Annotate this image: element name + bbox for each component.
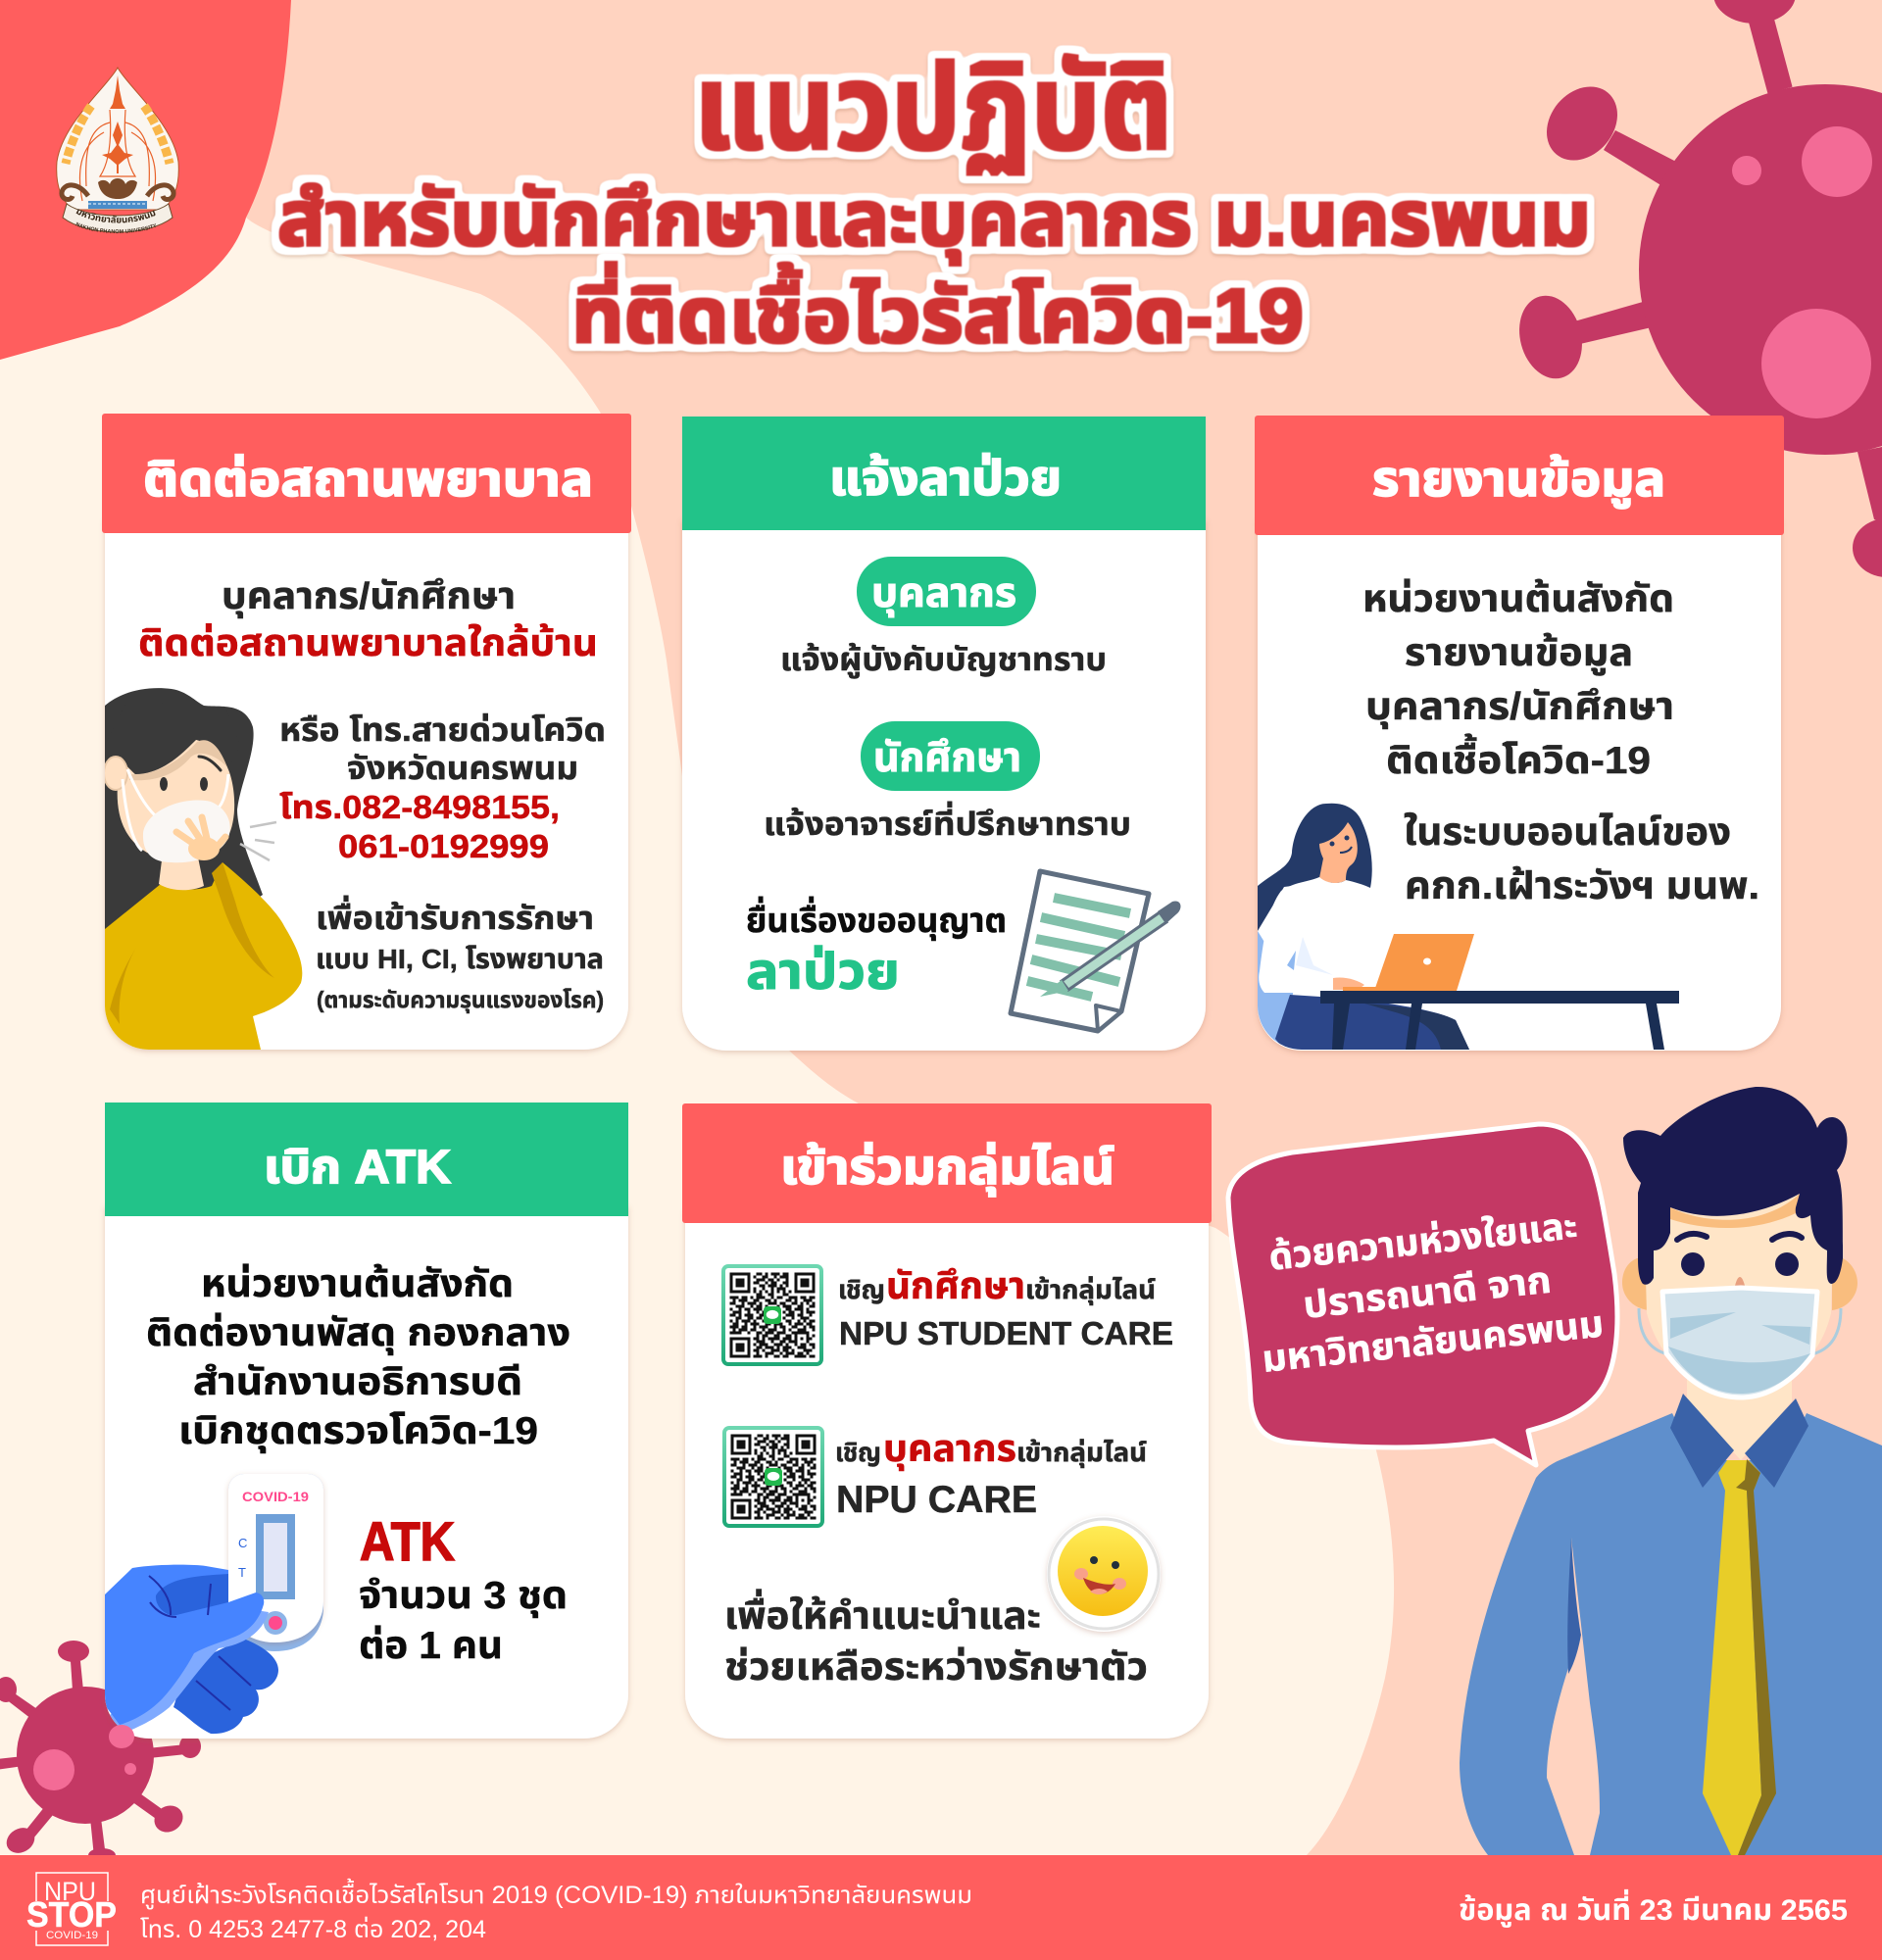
callout line 3: มหาวิทยาลัยนครพนม <box>1261 1304 1606 1381</box>
panel: notify sick leave <box>682 416 1206 1051</box>
illustration: masked man <box>1460 1087 1882 1855</box>
hair shadow <box>1670 1194 1800 1228</box>
text block: nearby hospital: ติดต่อสถานพยาบาลใกล้บ้าน <box>138 623 598 664</box>
panel: request ATK <box>105 1102 628 1748</box>
background: cream blob <box>0 196 1394 1960</box>
icon: ATK test cassette: COVID-19 <box>242 1489 309 1504</box>
face mask <box>1662 1288 1817 1397</box>
icon: smiley <box>1047 1516 1161 1632</box>
hair <box>1623 1087 1847 1285</box>
phone number 2: 061-0192999 <box>338 828 549 864</box>
text block: notify supervisor: แจ้งผู้บังคับบัญชาทราบ <box>780 641 1107 679</box>
logo: NPU STOP COVID-19 <box>25 1873 120 1945</box>
icon: ATK test cassette <box>228 1474 323 1651</box>
text block: infected: ติดเชื้อโควิด-19 <box>1386 733 1651 782</box>
logo: NPU STOP COVID-19: STOP <box>26 1894 117 1935</box>
text block: office: สำนักงานอธิการบดี <box>193 1361 522 1403</box>
footer text: date: ข้อมูล ณ วันที่ 23 มีนาคม 2565 <box>1459 1888 1848 1928</box>
footer <box>0 1855 1882 1960</box>
eyebrows <box>1677 1234 1802 1240</box>
QR code: staff <box>722 1426 824 1528</box>
text block: who: บุคลากร/นักศึกษา <box>222 576 516 618</box>
callout line 1: ด้วยความห่วงใยและ <box>1267 1205 1579 1279</box>
footer bar <box>0 1855 1882 1960</box>
panel: contact hospital <box>102 414 631 1050</box>
ear loops <box>1639 1259 1841 1354</box>
text block: hotline: หรือ โทร.สายด่วนโควิด <box>279 711 606 748</box>
text block: invite staff: เชิญ <box>835 1438 881 1467</box>
text block: HI CI: แบบ HI, CI, โรงพยาบาล <box>316 944 604 974</box>
shirt <box>1460 1413 1882 1855</box>
card body <box>105 519 628 1050</box>
panel: join LINE group <box>682 1103 1212 1739</box>
pill: staff: บุคลากร <box>871 569 1016 617</box>
text block: unit: หน่วยงานต้นสังกัด <box>201 1263 514 1305</box>
text block: treatment: เพื่อเข้ารับการรักษา <box>316 895 594 936</box>
highlight: students: นักศึกษา <box>886 1266 1025 1307</box>
nose <box>1735 1277 1745 1286</box>
header <box>102 414 631 533</box>
title line 1: แนวปฏิบัติ <box>694 41 1172 174</box>
header <box>105 1102 628 1216</box>
panel: report data <box>1255 416 1784 1051</box>
bubble shape <box>1228 1124 1617 1465</box>
text block: join line: เข้ากลุ่มไลน์ <box>1025 1275 1156 1305</box>
logo: Nakhon Phanom University seal <box>56 67 179 233</box>
tie <box>1703 1460 1761 1855</box>
heading: เข้าร่วมกลุ่มไลน์ <box>780 1140 1114 1197</box>
highlight: staff: บุคลากร <box>883 1429 1016 1471</box>
virus: top right <box>1511 0 1882 577</box>
neck <box>1687 1372 1792 1460</box>
text block: join line: เข้ากลุ่มไลน์ <box>1016 1438 1147 1468</box>
text block: sick leave: ลาป่วย <box>746 944 900 1001</box>
text block: report: รายงานข้อมูล <box>1405 632 1633 675</box>
text block: unit: หน่วยงานต้นสังกัด <box>1362 578 1674 620</box>
callout line 2: ปรารถนาดี จาก <box>1302 1260 1554 1327</box>
title line 3: ที่ติดเชื้อไวรัสโควิด-19 <box>571 263 1304 359</box>
sleeve fold <box>1567 1538 1581 1674</box>
text block: severity note: (ตามระดับความรุนแรงของโรค) <box>317 987 604 1013</box>
text block: test kit: เบิกชุดตรวจโควิด-19 <box>178 1410 538 1453</box>
icon: gloved hand <box>105 1565 278 1735</box>
header <box>682 416 1206 530</box>
icon: ATK test cassette: C <box>238 1536 247 1550</box>
footer text: center name: ศูนย์เฝ้าระวังโรคติดเชื้อไวรัสโคโรนา 2019 (COVID-19) ภายในมหาวิทยาลัยนครพนม <box>140 1878 972 1910</box>
icon: ATK test cassette: T <box>238 1565 246 1580</box>
text block: ATK: ATK <box>360 1510 455 1572</box>
logo: Nakhon Phanom University seal: NAKHON PHANOM UNIVERSITY <box>75 221 156 233</box>
text block: notify advisor: แจ้งอาจารย์ที่ปรึกษาทราบ <box>764 801 1131 842</box>
illustration: coughing woman <box>104 688 302 1050</box>
ears <box>1622 1258 1857 1310</box>
illustration: woman at laptop <box>1258 804 1679 1050</box>
text block: help: ช่วยเหลือระหว่างรักษาตัว <box>724 1646 1148 1689</box>
text block: who: บุคลากร/นักศึกษา <box>1365 686 1674 729</box>
text block: quantity: จำนวน 3 ชุด <box>359 1575 568 1618</box>
heading: เบิก ATK <box>264 1142 451 1194</box>
title <box>277 41 1591 359</box>
text block: online system: ในระบบออนไลน์ของ <box>1404 811 1731 854</box>
phone number 1: โทร.082-8498155, <box>279 789 560 825</box>
text block: committee: คกก.เฝ้าระวังฯ มนพ. <box>1405 865 1759 907</box>
background: red corner blob <box>0 0 291 360</box>
header <box>1255 416 1784 535</box>
text block: advice: เพื่อให้คำแนะนำและ <box>724 1589 1041 1638</box>
heading: ติดต่อสถานพยาบาล <box>143 452 593 507</box>
text block: per person: ต่อ 1 คน <box>359 1625 503 1667</box>
virus: bottom left <box>0 1641 201 1862</box>
logo: Nakhon Phanom University seal: มหาวิทยาลัยนครพนม <box>76 209 155 223</box>
heading: รายงานข้อมูล <box>1372 452 1665 509</box>
text block: NPU student care: NPU STUDENT CARE <box>839 1315 1173 1351</box>
QR code: students <box>721 1264 823 1366</box>
heading: แจ้งลาป่วย <box>829 451 1062 506</box>
virus spot over card corner <box>109 1725 134 1748</box>
icon: document and pencil <box>1011 871 1181 1031</box>
pill: students: นักศึกษา <box>873 734 1021 780</box>
text block: NPU care: NPU CARE <box>836 1479 1037 1521</box>
collar <box>1670 1394 1808 1488</box>
footer text: phone: โทร. 0 4253 2477-8 ต่อ 202, 204 <box>140 1916 486 1943</box>
text block: province: จังหวัดนครพนม <box>347 750 578 786</box>
text block: invite students: เชิญ <box>838 1275 885 1304</box>
header <box>682 1103 1212 1223</box>
card body <box>685 1210 1209 1739</box>
face <box>1643 1176 1834 1392</box>
text block: submit request: ยื่นเรื่องขออนุญาต <box>746 896 1007 941</box>
pill: staff <box>857 557 1036 626</box>
eyes <box>1681 1252 1799 1276</box>
card body <box>1258 519 1781 1051</box>
title line 2: สำหรับนักศึกษาและบุคลากร ม.นครพนม <box>277 175 1591 265</box>
tie shade <box>1736 1459 1776 1855</box>
card body <box>105 1205 628 1739</box>
text block: contact supply: ติดต่องานพัสดุ กองกลาง <box>146 1312 570 1355</box>
logo: NPU STOP COVID-19: NPU <box>44 1877 96 1906</box>
callout: speech bubble <box>1228 1124 1617 1465</box>
logo: NPU STOP COVID-19: COVID-19 <box>46 1930 98 1941</box>
card body <box>682 519 1206 1051</box>
pill: students <box>861 721 1040 791</box>
